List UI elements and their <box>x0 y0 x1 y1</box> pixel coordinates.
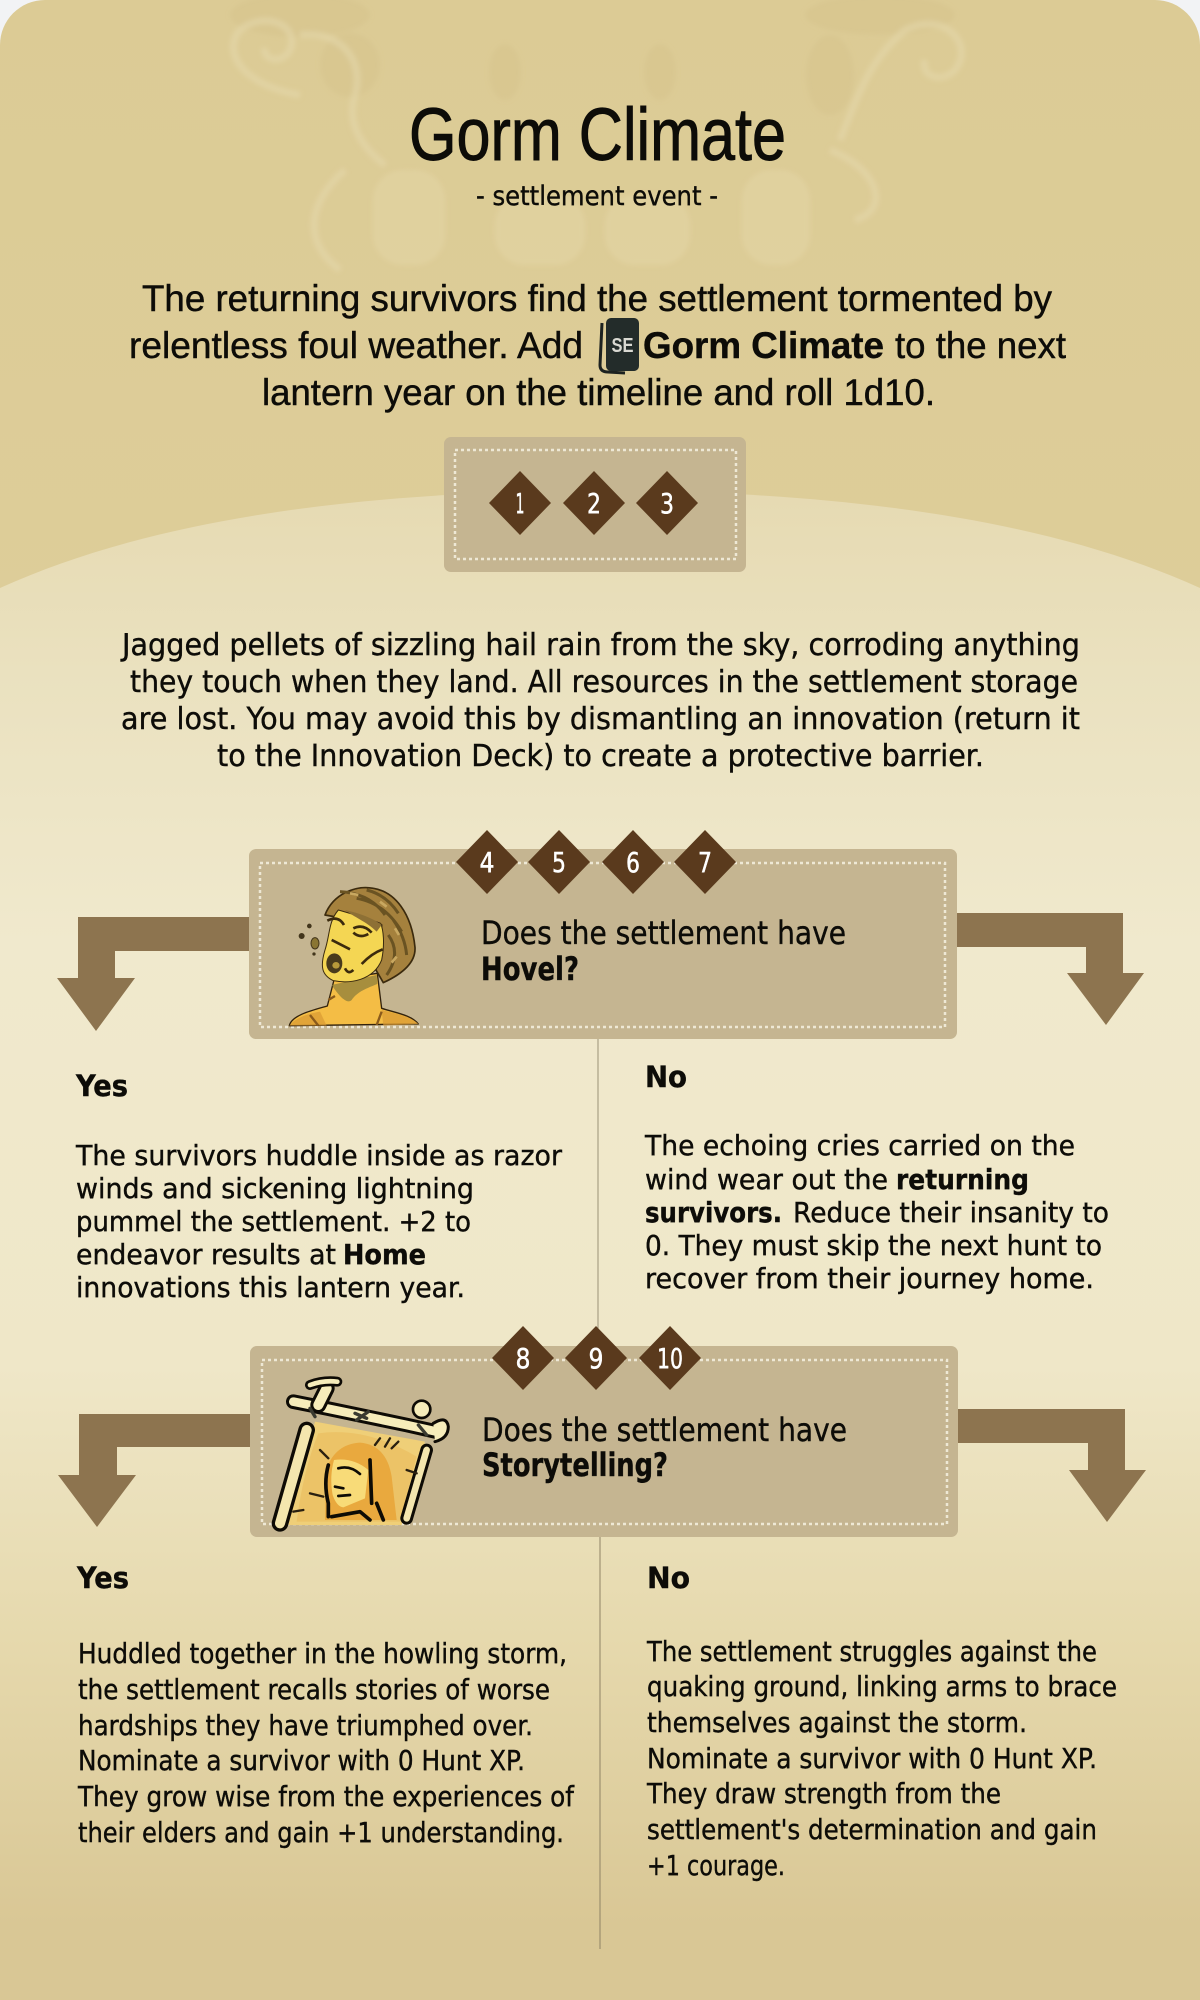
Yes branch: Storytelling: Huddled together in the howling storm, <box>78 1637 567 1670</box>
intro text block: Gorm Climate <box>643 325 884 366</box>
arrow: Hovel no <box>955 913 1144 1025</box>
Yes branch: Storytelling: the settlement recalls stories of worse <box>78 1673 550 1706</box>
No branch: Hovel: No <box>645 1060 687 1094</box>
Yes branch: Hovel: pummel the settlement. +2 to <box>76 1205 471 1238</box>
diamond: 3 <box>636 471 698 535</box>
panel: roll 1 2 3 <box>444 437 746 572</box>
No branch: Storytelling: The settlement struggles against the <box>646 1635 1097 1668</box>
icon: story scroll <box>280 1381 448 1525</box>
diamond: 10: 10 <box>657 1342 683 1375</box>
panel: Hovel question <box>249 830 957 1039</box>
No branch: Hovel: returning <box>896 1163 1029 1196</box>
No branch: Storytelling: settlement's determination and gain <box>647 1813 1097 1846</box>
icon: settlement event card <box>600 318 639 373</box>
diamond: 3: 3 <box>660 487 674 520</box>
question text <box>482 1411 847 1484</box>
diamond: 9 <box>565 1326 627 1390</box>
outcome text 1-3: they touch when they land. All resources in the settlement storage <box>130 665 1078 700</box>
diamond: 7 <box>674 830 736 894</box>
divider line: upper branches <box>598 1039 599 1349</box>
arrow: Storytelling no <box>956 1409 1146 1522</box>
No branch: Hovel: The echoing cries carried on the <box>644 1129 1075 1162</box>
diamond: 1 <box>489 471 551 535</box>
No branch: Hovel: survivors. <box>645 1196 782 1229</box>
panel: Storytelling question <box>250 1326 958 1537</box>
Yes branch: Storytelling: They grow wise from the experiences of <box>77 1780 575 1813</box>
diamond: 4: 4 <box>480 846 494 879</box>
outcome text 1-3 <box>120 628 1080 774</box>
arrow: Storytelling yes <box>58 1414 251 1527</box>
No branch: Hovel: Reduce their insanity to <box>793 1196 1109 1229</box>
intro text block: The returning survivors find the settlement tormented by <box>142 278 1052 319</box>
title: Gorm Climate <box>409 93 786 176</box>
No branch: Storytelling: +1 courage. <box>647 1849 785 1882</box>
diamond: 4 <box>456 830 518 894</box>
Yes branch: Storytelling <box>76 1561 575 1849</box>
outcome text 1-3: to the Innovation Deck) to create a protective barrier. <box>217 739 984 774</box>
intro text block: to the next <box>895 325 1067 366</box>
outcome text 1-3: are lost. You may avoid this by dismantling an innovation (return it <box>121 702 1080 737</box>
arrow: Hovel yes <box>57 917 249 1031</box>
diamond: 2: 2 <box>587 487 601 520</box>
diamond: 5 <box>528 830 590 894</box>
diamond: 1: 1 <box>516 487 524 520</box>
intro text block: lantern year on the timeline and roll 1d10. <box>262 372 935 413</box>
No branch: Hovel: 0. They must skip the next hunt to <box>645 1229 1102 1262</box>
question text <box>481 914 846 988</box>
diamond: 6: 6 <box>626 846 640 879</box>
icon: survivor head <box>289 888 418 1026</box>
Yes branch: Hovel: Home <box>343 1238 426 1271</box>
divider line: lower branches <box>600 1536 601 1949</box>
No branch: Storytelling: themselves against the storm. <box>647 1706 1027 1739</box>
question text: Storytelling? <box>482 1446 668 1484</box>
Yes branch: Storytelling: Yes <box>76 1561 129 1595</box>
No branch: Storytelling <box>646 1561 1117 1882</box>
Yes branch: Hovel: endeavor results at <box>76 1238 336 1271</box>
No branch: Storytelling: Nominate a survivor with 0 Hunt XP. <box>647 1742 1097 1775</box>
diamond: 6 <box>602 830 664 894</box>
diamond: 5: 5 <box>552 846 566 879</box>
No branch: Hovel: recover from their journey home. <box>645 1262 1094 1295</box>
Yes branch: Storytelling: Nominate a survivor with 0 Hunt XP. <box>78 1744 525 1777</box>
Yes branch: Storytelling: hardships they have triumphed over. <box>78 1709 533 1742</box>
No branch: Storytelling: No <box>647 1561 690 1595</box>
No branch: Storytelling: They draw strength from the <box>646 1777 1001 1810</box>
outcome text 1-3: Jagged pellets of sizzling hail rain from the sky, corroding anything <box>120 628 1080 663</box>
diamond: 10 <box>639 1326 701 1390</box>
No branch: Storytelling: quaking ground, linking arms to brace <box>647 1670 1117 1703</box>
subtitle: - settlement event - <box>476 181 718 212</box>
question text: Hovel? <box>481 950 579 988</box>
Yes branch: Hovel <box>75 1069 562 1304</box>
Yes branch: Storytelling: their elders and gain +1 understanding. <box>78 1816 564 1849</box>
intro text block <box>129 278 1067 413</box>
icon: settlement event card: SE <box>612 335 634 357</box>
No branch: Hovel: wind wear out the <box>645 1163 888 1196</box>
question text: Does the settlement have <box>482 1411 847 1449</box>
intro text block: relentless foul weather. Add <box>129 325 583 366</box>
Yes branch: Hovel: winds and sickening lightning <box>76 1172 474 1205</box>
No branch: Hovel <box>644 1060 1109 1295</box>
diamond: 2 <box>563 471 625 535</box>
diamond: 8: 8 <box>516 1342 530 1375</box>
diamond: 7: 7 <box>698 846 712 879</box>
diamond: 9: 9 <box>588 1342 604 1375</box>
question text: Does the settlement have <box>481 914 846 952</box>
Yes branch: Hovel: Yes <box>75 1069 128 1103</box>
diamond: 8 <box>492 1326 554 1390</box>
Yes branch: Hovel: The survivors huddle inside as razor <box>75 1139 562 1172</box>
Yes branch: Hovel: innovations this lantern year. <box>76 1271 465 1304</box>
